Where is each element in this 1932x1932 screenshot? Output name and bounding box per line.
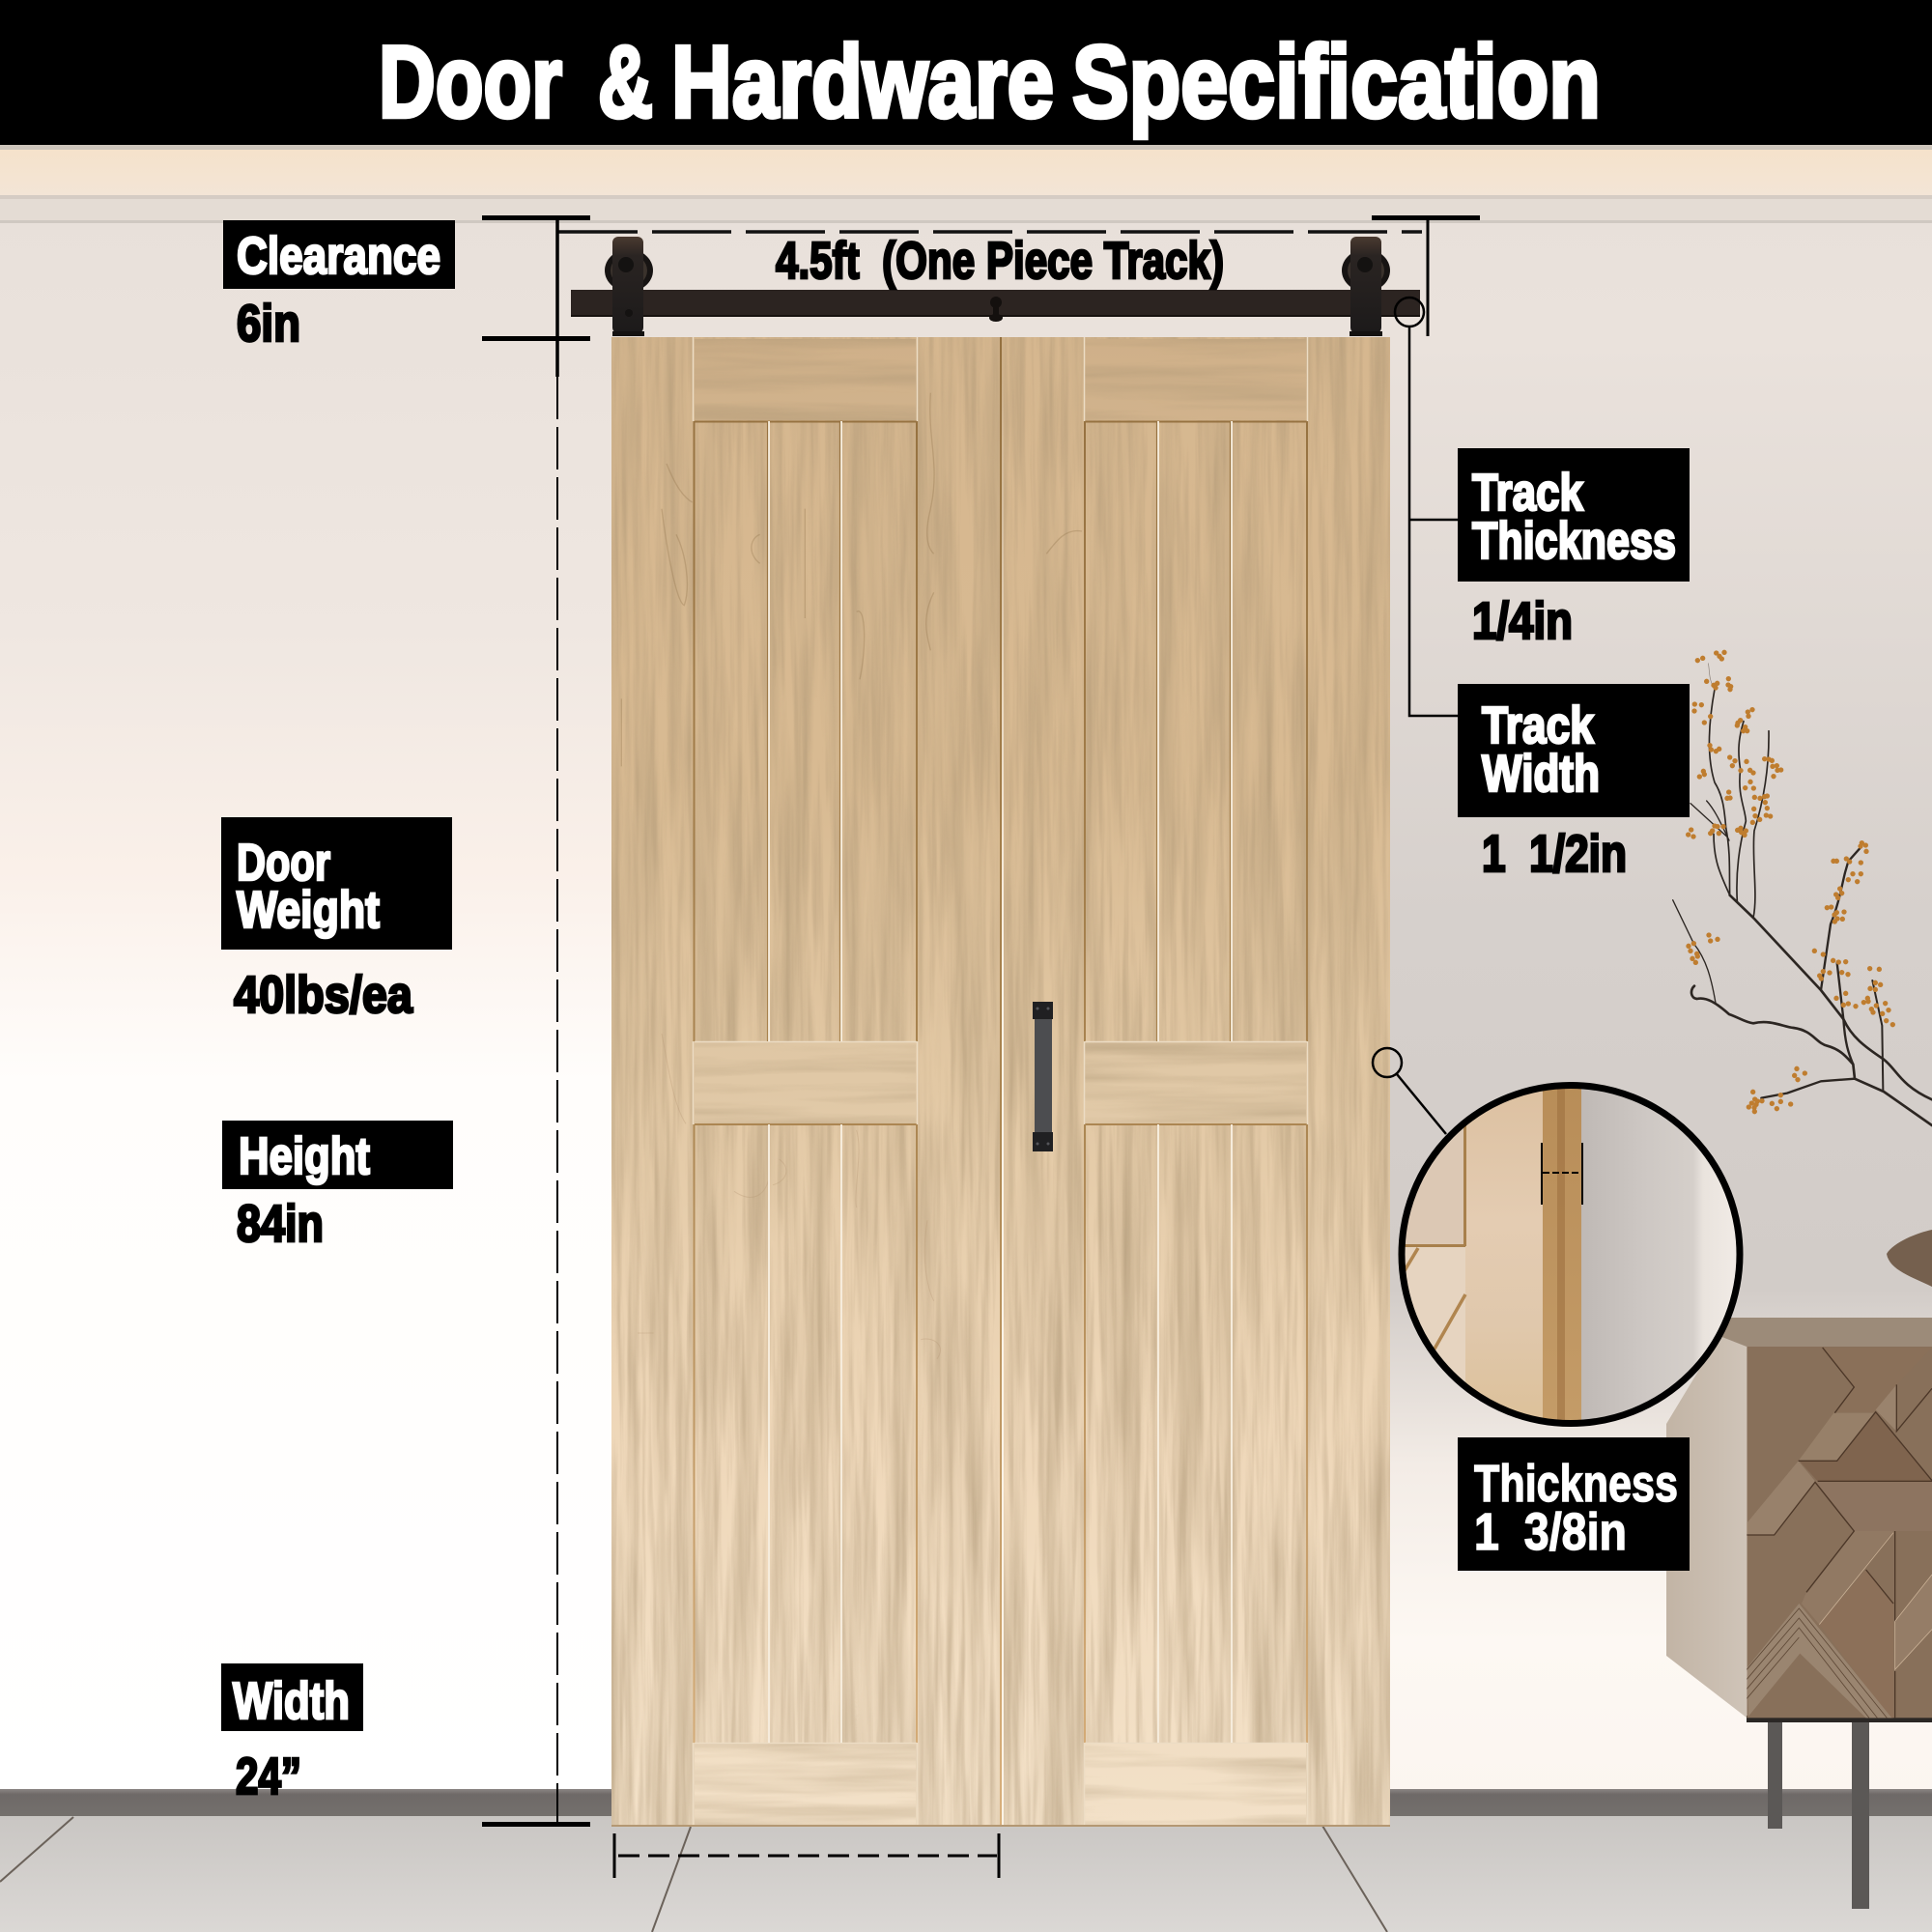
label: track thickness: 1/4in (1472, 592, 1573, 650)
label: door weight (221, 817, 452, 1024)
title bar: Hardware (671, 25, 1054, 139)
branch stems (1673, 664, 1932, 1125)
cabinet top (1719, 1318, 1932, 1347)
width dimension (614, 1833, 999, 1878)
label: door thickness: 1 3/8in (1474, 1503, 1627, 1561)
orange berries (1686, 650, 1895, 1114)
track length dimension (558, 215, 1480, 336)
fine wood grain (611, 337, 1390, 1827)
title bar: & (598, 25, 653, 139)
floor (0, 1816, 1932, 1932)
track callout leader (1395, 298, 1458, 716)
ceiling and moulding (0, 145, 1932, 223)
skirting board (0, 1789, 1932, 1816)
label: height (222, 1121, 453, 1253)
label: door thickness: Thickness (1474, 1455, 1678, 1513)
magnified thickness detail (1373, 1048, 1746, 1430)
leader (1373, 1048, 1446, 1134)
branch with berries (1673, 650, 1932, 1125)
label: door weight: Door (237, 834, 330, 892)
plank grooves (694, 337, 1307, 1827)
track length label: 4.5ft (One Piece Track) (776, 232, 1224, 290)
label: track thickness: Track (1472, 464, 1584, 522)
label: track thickness (1458, 448, 1690, 650)
label: track thickness: Thickness (1472, 512, 1676, 570)
label: track width (1458, 684, 1690, 883)
label: track width: Track (1482, 696, 1595, 754)
lens ring (1402, 1086, 1740, 1424)
vertical wood grain (611, 337, 1390, 1827)
label: door thickness (1458, 1437, 1690, 1571)
clearance and height dimension (482, 215, 590, 1827)
door handle (1033, 1002, 1053, 1151)
door base (611, 337, 1390, 1827)
label: clearance: Clearance (237, 227, 440, 285)
title bar: Door (379, 25, 562, 139)
title bar: Specification (1072, 25, 1601, 139)
rails (695, 339, 1306, 1826)
label: door weight: 40lbs/ea (234, 966, 413, 1024)
label: width (221, 1663, 363, 1805)
vase on cabinet (1887, 1230, 1932, 1287)
barn door (611, 337, 1390, 1827)
right roller hanger (1342, 237, 1390, 336)
label: clearance: 6in (237, 295, 300, 353)
cabinet shadow strip (1747, 1716, 1932, 1722)
cabinet legs (1768, 1715, 1869, 1909)
label: height: 84in (237, 1195, 324, 1253)
cabinet side (1666, 1336, 1747, 1718)
track centre bolt (989, 297, 1003, 322)
cathedral grain lower (638, 1034, 940, 1359)
label: track width: Width (1482, 745, 1600, 803)
title bar (0, 0, 1932, 145)
cabinet front panel (1747, 1347, 1932, 1718)
label: door weight: Weight (237, 881, 380, 939)
lens contents (1399, 1082, 1746, 1430)
label: track width: 1 1/2in (1482, 825, 1627, 883)
door thickness marker (1542, 1143, 1582, 1205)
cabinet (1666, 1230, 1932, 1909)
label: height: Height (239, 1127, 370, 1185)
label: clearance (223, 220, 455, 353)
cathedral grain upper (621, 393, 1082, 766)
sliding track (571, 237, 1420, 336)
label: width: 24” (236, 1747, 301, 1805)
left roller hanger (605, 237, 653, 336)
label: width: Width (233, 1672, 350, 1730)
